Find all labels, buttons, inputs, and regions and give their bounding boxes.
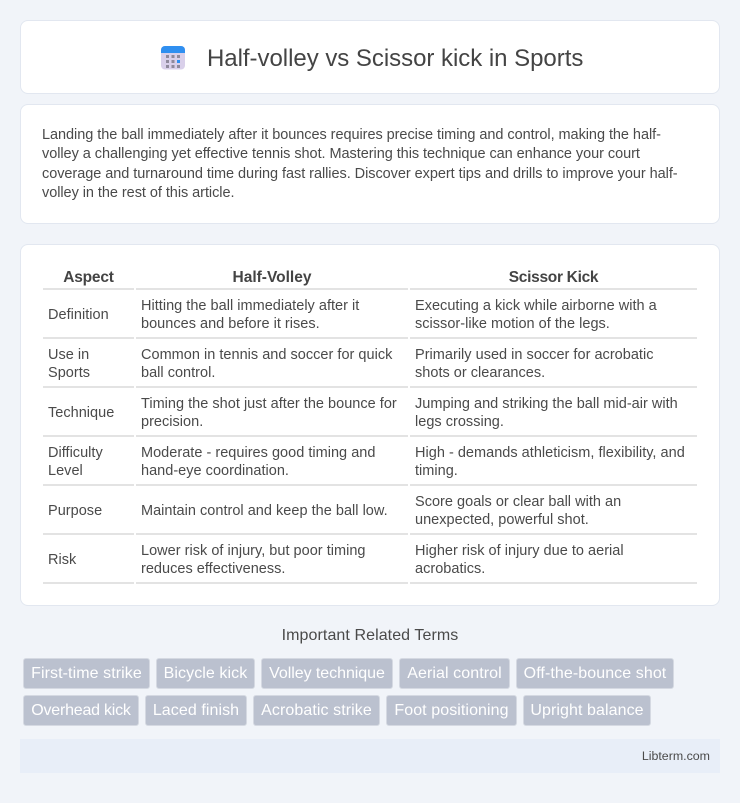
- footer credit: Libterm.com: [642, 749, 710, 763]
- row: Technique: precision.: [141, 414, 203, 430]
- row: Use in Sports: Sports: [48, 365, 90, 381]
- row: Purpose: Score goals or clear ball with an: [415, 494, 621, 510]
- row: Definition: [43, 298, 697, 339]
- intro text: volley in the rest of this article.: [42, 185, 234, 201]
- related term tags: Upright balance: [530, 702, 644, 719]
- related terms heading: Important Related Terms: [282, 627, 458, 644]
- related term tags: First-time strike: [31, 665, 142, 682]
- row: Use in Sports: [43, 347, 697, 388]
- intro text: [42, 127, 678, 201]
- row: Difficulty Level: Level: [48, 463, 83, 479]
- row: Technique: [43, 396, 697, 437]
- row: Risk: reduces effectiveness.: [141, 561, 285, 577]
- row: Purpose: [43, 494, 697, 535]
- title: Half-volley vs Scissor kick in Sports: [207, 45, 583, 72]
- table header: Scissor Kick: [509, 269, 598, 286]
- related term tags: Aerial control: [407, 665, 502, 682]
- row: Use in Sports: shots or clearances.: [415, 365, 545, 381]
- related term tags: Acrobatic strike: [261, 702, 372, 719]
- row: Risk: acrobatics.: [415, 561, 485, 577]
- intro card: [20, 104, 720, 224]
- row: Definition: Executing a kick while airborne with a: [415, 298, 657, 314]
- footer bar: [20, 739, 720, 773]
- comparison table card: [20, 244, 720, 606]
- intro text: coverage and turnaround time during fast rallies. Discover expert tips and drills to improve your half-: [42, 166, 678, 182]
- row: Definition: bounces and before it rises.: [141, 316, 320, 332]
- row: Difficulty Level: timing.: [415, 463, 458, 479]
- related term tags: Laced finish: [153, 702, 239, 719]
- row: Risk: Risk: [48, 552, 76, 568]
- row: Difficulty Level: hand-eye coordination.: [141, 463, 289, 479]
- row: Difficulty Level: High - demands athleticism, flexibility, and: [415, 445, 685, 461]
- row: Risk: [43, 543, 697, 584]
- row: Technique: Technique: [48, 405, 114, 421]
- title card: [20, 20, 720, 94]
- row: Technique: legs crossing.: [415, 414, 504, 430]
- row: Definition: Definition: [48, 307, 109, 323]
- row: Use in Sports: ball control.: [141, 365, 215, 381]
- row: Technique: Jumping and striking the ball mid-air with: [415, 396, 678, 412]
- intro text: volley a challenging yet effective tennis shot. Mastering this technique can enhance your court: [42, 146, 640, 162]
- row: Risk: Lower risk of injury, but poor timing: [141, 543, 366, 559]
- row: Risk: Higher risk of injury due to aerial: [415, 543, 624, 559]
- table header: Aspect: [63, 269, 114, 286]
- row: Purpose: Maintain control and keep the ball low.: [141, 503, 388, 519]
- row: Purpose: unexpected, powerful shot.: [415, 512, 589, 528]
- related term tags: Foot positioning: [394, 702, 509, 719]
- icon: calendar: [161, 46, 185, 70]
- related term tags: Volley technique: [269, 665, 385, 682]
- row: Use in Sports: Primarily used in soccer for acrobatic: [415, 347, 653, 363]
- row: Difficulty Level: Difficulty: [48, 445, 103, 461]
- row: Technique: Timing the shot just after the bounce for: [141, 396, 397, 412]
- related term tags: Overhead kick: [31, 702, 131, 719]
- row: Difficulty Level: [43, 445, 697, 486]
- related term tags: Off-the-bounce shot: [524, 665, 666, 682]
- row: Purpose: Purpose: [48, 503, 102, 519]
- intro text: Landing the ball immediately after it bounces requires precise timing and control, making the half-: [42, 127, 661, 143]
- row: Definition: scissor-like motion of the legs.: [415, 316, 610, 332]
- row: Use in Sports: Use in: [48, 347, 89, 363]
- related term tags: [23, 658, 674, 726]
- table header: [43, 269, 697, 290]
- table header: Half-Volley: [233, 269, 311, 286]
- related term tags: Bicycle kick: [164, 665, 247, 682]
- row: Difficulty Level: Moderate - requires good timing and: [141, 445, 375, 461]
- row: Definition: Hitting the ball immediately after it: [141, 298, 359, 314]
- row: Use in Sports: Common in tennis and soccer for quick: [141, 347, 392, 363]
